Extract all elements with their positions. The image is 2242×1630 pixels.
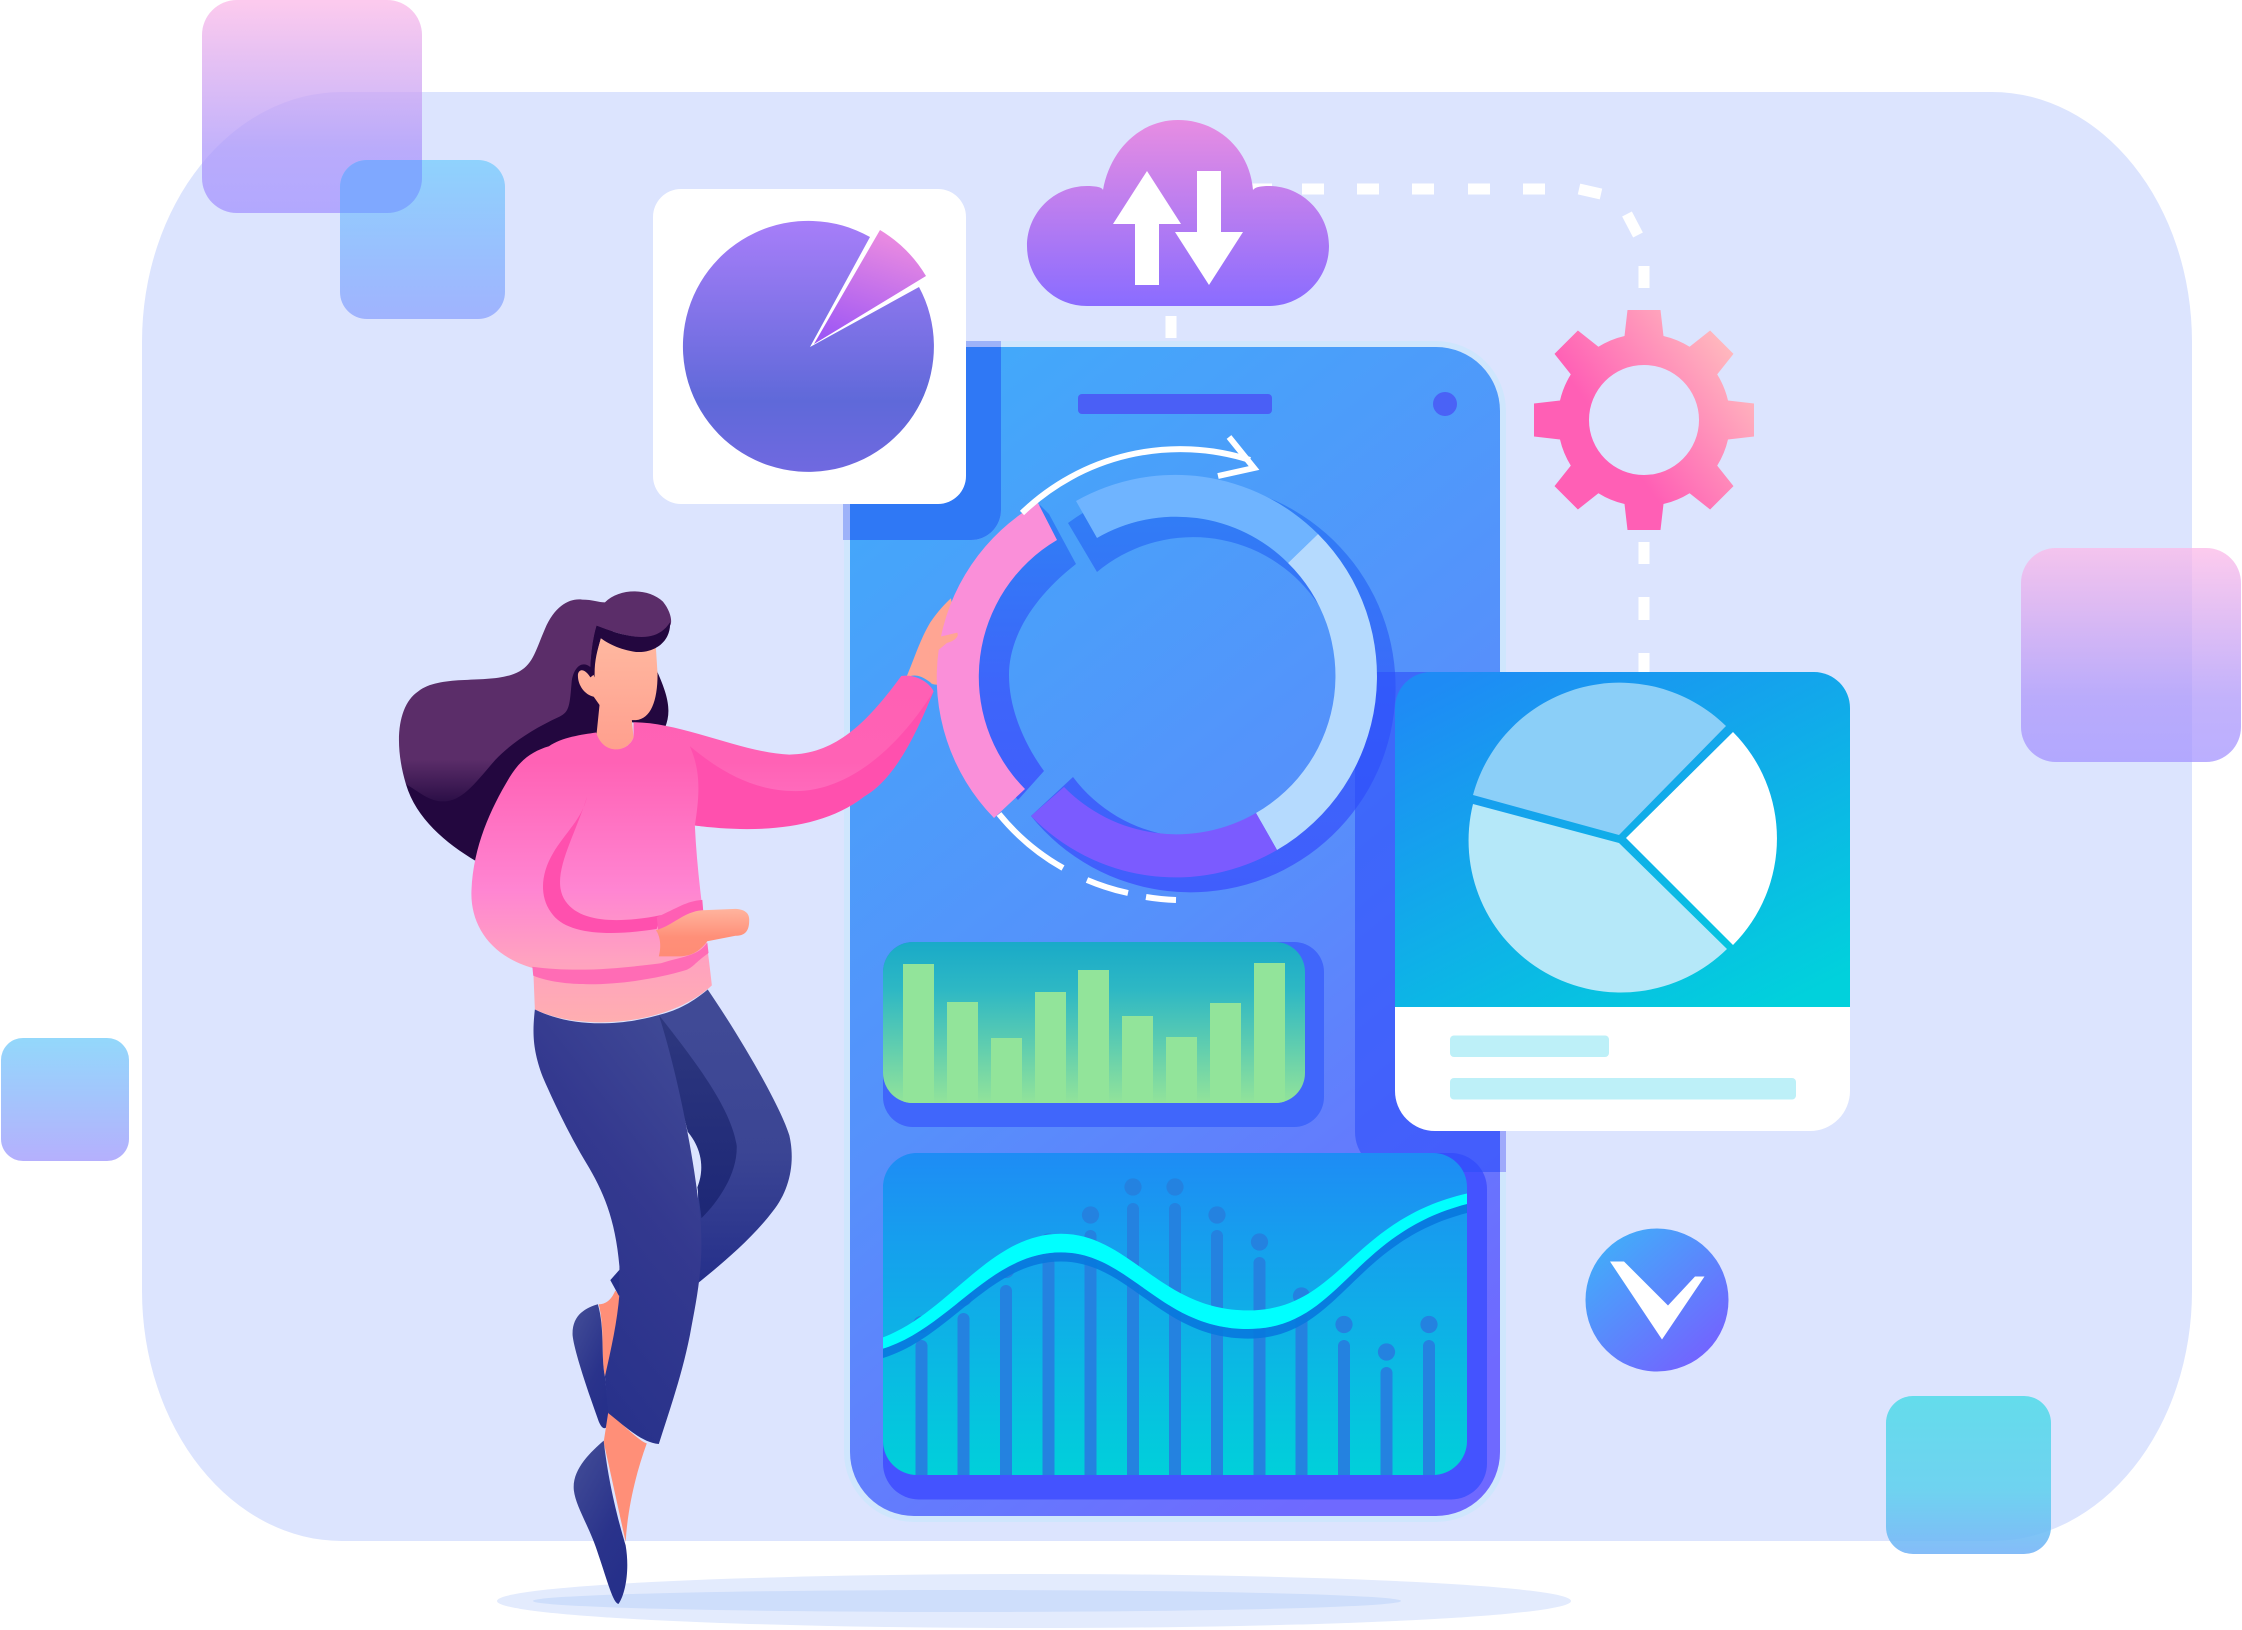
gap between legs — [688, 1132, 701, 1187]
floor shadow — [497, 1574, 1571, 1628]
decorative square: pink top left — [202, 0, 422, 213]
dashed connector — [1166, 184, 1650, 675]
pointing hand — [656, 909, 749, 956]
phone camera dot — [1433, 392, 1457, 416]
lollipop bars — [913, 1178, 1438, 1493]
inner leg shade — [659, 1015, 737, 1218]
icon: check badge — [1586, 1228, 1728, 1372]
pie small slice — [814, 230, 926, 344]
ring segment: pink — [937, 503, 1057, 818]
sleeve fold — [543, 797, 661, 933]
pie slice: blue — [1473, 683, 1726, 835]
ring shadow — [969, 482, 1396, 892]
white pie card — [653, 189, 966, 504]
pie slice: white — [1626, 732, 1777, 945]
reaching finger — [922, 633, 958, 684]
ring segment: pale blue — [1256, 534, 1377, 850]
front shoe — [574, 1441, 627, 1604]
decorative square: blue left — [1, 1038, 129, 1161]
pie main slice — [683, 221, 934, 472]
text placeholder short — [1450, 1036, 1609, 1057]
sweater with arm — [471, 676, 934, 1022]
line chart shadow — [883, 1153, 1487, 1500]
back shoe — [573, 1304, 609, 1428]
decorative square: teal bottom right — [1886, 1396, 2051, 1554]
bar chart — [883, 942, 1305, 1103]
lower leg skin — [604, 1412, 647, 1542]
data card with pie — [1395, 672, 1850, 1131]
decorative square: pink right — [2021, 548, 2241, 762]
reaching hand palm — [906, 598, 963, 688]
icon: gear — [1534, 310, 1754, 530]
cuff band — [532, 943, 709, 984]
circular cycle ring — [937, 475, 1377, 877]
arrow up — [1113, 171, 1181, 285]
front leg — [534, 1009, 701, 1444]
back leg — [659, 989, 792, 1284]
bar chart shadow — [883, 942, 1324, 1127]
text placeholder long — [1450, 1078, 1796, 1100]
icon: cloud with up and down arrows — [1027, 120, 1329, 306]
line chart — [883, 1153, 1467, 1493]
phone speaker bar — [1078, 394, 1272, 414]
wrist fold — [657, 900, 704, 936]
white pie card shadow — [843, 341, 1001, 540]
phone body — [850, 347, 1500, 1516]
pie slice: pale — [1469, 804, 1727, 992]
face and ear — [578, 638, 658, 750]
ring segment: sky blue — [1076, 475, 1318, 563]
cuff sliver — [610, 1270, 621, 1297]
fringe shadow — [590, 622, 670, 677]
woman figure — [399, 591, 958, 1604]
ring segment: purple — [1031, 787, 1277, 877]
arrow down — [1175, 171, 1243, 285]
wave shadow — [883, 1204, 1467, 1358]
wave cyan — [883, 1194, 1467, 1349]
decorative square: blue top left — [340, 160, 505, 319]
data card shadow — [1355, 672, 1506, 1172]
hair back — [406, 619, 668, 861]
back foot skin — [599, 1290, 619, 1377]
hair main — [399, 591, 671, 801]
white cycle arrow — [999, 437, 1254, 900]
arm underside — [690, 691, 934, 829]
phone halo — [844, 341, 1506, 1522]
